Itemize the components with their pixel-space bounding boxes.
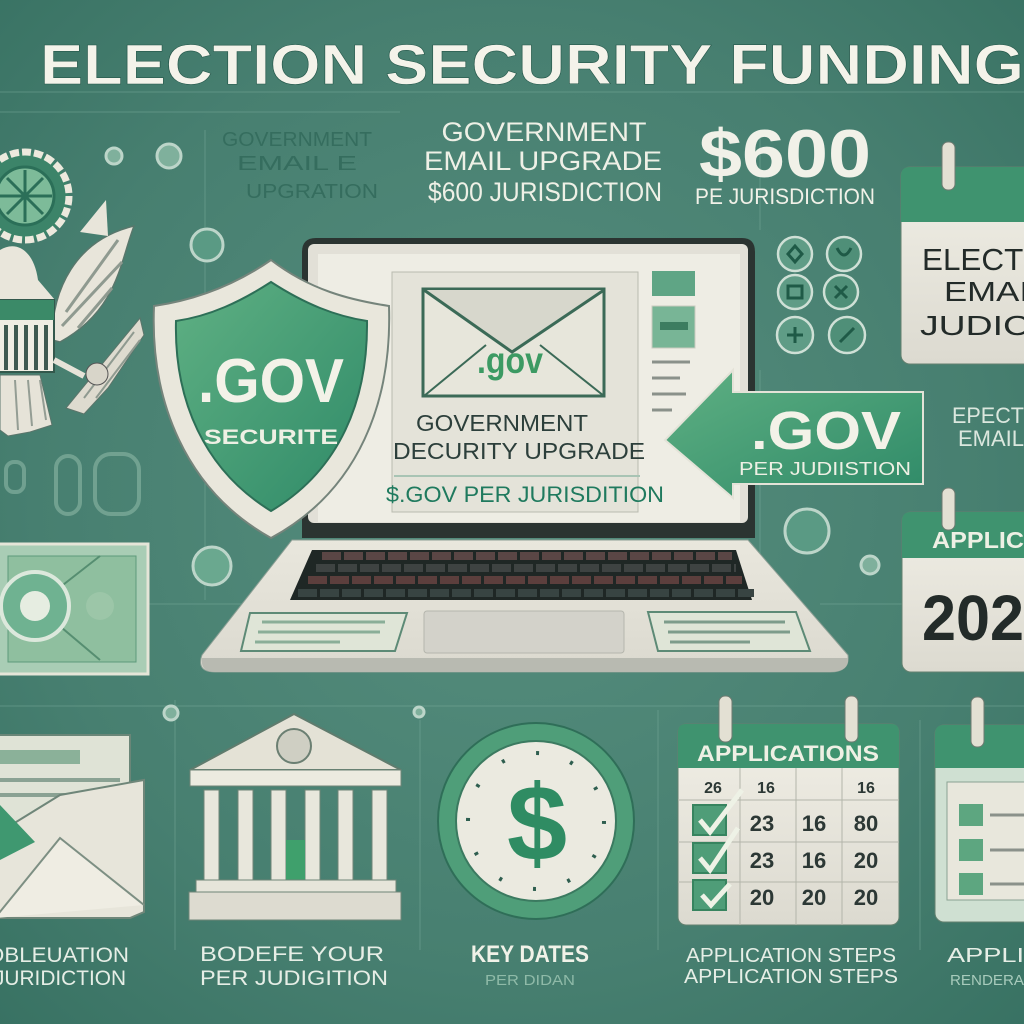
calendar: applications: 23 xyxy=(750,811,774,836)
arrow: .gov per jurisdiction xyxy=(665,370,923,498)
faded icons xyxy=(6,454,139,514)
icon: eagle seal xyxy=(0,152,144,436)
bottom label 4: APPLICATION STEPS xyxy=(686,945,896,967)
bottom label 5 xyxy=(947,945,1024,989)
icon: dollar clock: $ xyxy=(507,762,567,883)
price callout: PE JURISDICTION xyxy=(695,184,875,209)
heading: government email upgrade xyxy=(424,117,662,207)
bottom label 3: key dates xyxy=(471,941,589,989)
calendar: election email: EMAI xyxy=(944,276,1024,307)
calendar: applications: 80 xyxy=(854,811,878,836)
calendar: election email xyxy=(901,142,1024,364)
bottom label 2 xyxy=(200,943,388,990)
label: epect email xyxy=(952,403,1024,451)
screen heading: GOVERNMENT xyxy=(416,410,588,436)
icon grid xyxy=(777,237,865,353)
calendar: applications: 26 xyxy=(704,780,722,797)
screen inner panel xyxy=(392,272,638,512)
envelope: .gov xyxy=(477,340,543,381)
icon: dollar clock xyxy=(438,723,634,919)
label: epect email: EMAIL xyxy=(958,426,1024,451)
keyboard xyxy=(290,550,752,600)
trackpad xyxy=(424,611,624,653)
calendar: applications: 16 xyxy=(857,780,875,797)
calendar: applications: 16 xyxy=(757,780,775,797)
shield xyxy=(154,260,389,538)
envelope xyxy=(423,289,604,396)
side widgets on screen xyxy=(652,271,695,410)
calendar: applications: 20 xyxy=(854,848,878,873)
icon: open envelope xyxy=(0,735,144,918)
screen heading xyxy=(393,410,645,464)
calendar: checklist xyxy=(935,697,1024,922)
price callout xyxy=(695,116,875,209)
faded label: government email upgrade: EMAIL E xyxy=(237,153,357,175)
icon: government building xyxy=(189,714,401,920)
bottom label 5: APPLI xyxy=(947,945,1024,967)
shield: .GOV xyxy=(198,347,344,416)
calendar: election email: JUDIC xyxy=(920,310,1024,341)
calendar: applications: 20 xyxy=(750,885,774,910)
bottom label 5: RENDERA xyxy=(950,972,1024,989)
heading: government email upgrade: GOVERNMENT xyxy=(442,117,646,147)
left palm card xyxy=(241,613,407,651)
calendar: applications: 16 xyxy=(802,848,826,873)
bottom label 3: key dates: PER DIDAN xyxy=(485,972,575,989)
arrow: .gov per jurisdiction: .GOV xyxy=(751,401,901,461)
bottom label 4: APPLICATION STEPS xyxy=(684,966,898,988)
calendar: applications: 20 xyxy=(802,885,826,910)
small nodes xyxy=(106,144,879,720)
calendar: applications: 20 xyxy=(854,885,878,910)
bottom label 3: key dates: KEY DATES xyxy=(471,941,589,968)
bottom label 1 xyxy=(0,944,129,990)
right palm card xyxy=(648,612,810,651)
calendar: applications: 16 xyxy=(802,811,826,836)
bottom label 2: PER JUDIGITION xyxy=(200,967,388,990)
heading: government email upgrade: EMAIL UPGRADE xyxy=(424,146,662,176)
screen subtext: $.GOV PER JURISDITION xyxy=(386,482,664,507)
shield: SECURITE xyxy=(204,426,338,449)
price callout: $600 xyxy=(699,116,871,192)
laptop xyxy=(201,238,848,672)
faded label: government email upgrade: GOVERNMENT xyxy=(222,129,372,151)
arrow: .gov per jurisdiction: PER JUDIISTION xyxy=(739,459,911,479)
icon: banknote xyxy=(0,544,148,674)
heading: government email upgrade: $600 JURISDICTION xyxy=(428,177,662,207)
calendar: applications: APPLICATIONS xyxy=(697,741,879,766)
calendar: applications 202: APPLIC xyxy=(932,527,1024,553)
screen xyxy=(318,254,740,522)
screen bezel xyxy=(302,238,755,538)
title: ELECTION SECURITY FUNDING xyxy=(40,33,1024,97)
calendar: applications 202 xyxy=(902,488,1024,672)
calendar: applications xyxy=(678,696,899,925)
faded label: government email upgrade xyxy=(222,129,378,203)
calendar: applications: 23 xyxy=(750,848,774,873)
bottom label 2: BODEFE YOUR xyxy=(200,943,384,966)
faded label: government email upgrade: UPGRATION xyxy=(246,181,378,203)
label: epect email: EPECT xyxy=(952,403,1024,428)
bottom label 4 xyxy=(684,945,898,988)
screen heading: DECURITY UPGRADE xyxy=(393,438,645,464)
laptop base xyxy=(201,540,848,672)
